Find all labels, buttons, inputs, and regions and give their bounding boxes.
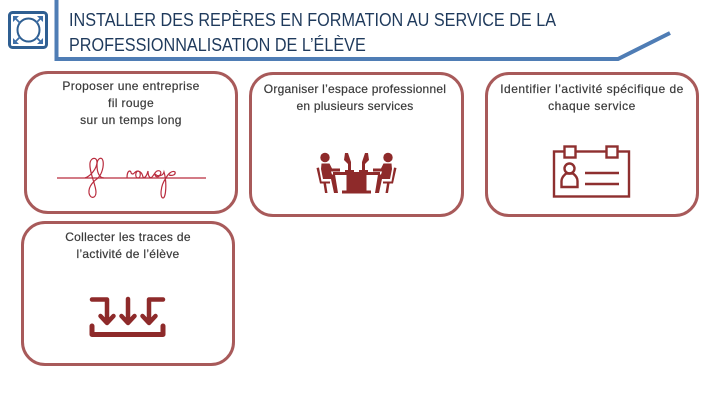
panel: identifier l'activité (485, 72, 699, 217)
panel: proposer une entreprise (24, 71, 238, 214)
text: proposer une entreprise: fil rouge (108, 96, 154, 110)
text: identifier l'activité (500, 82, 684, 113)
panel: collecter les traces (21, 221, 235, 366)
text: proposer une entreprise: Proposer une entreprise (62, 79, 200, 93)
text: proposer une entreprise (62, 79, 200, 127)
title: INSTALLER DES REPÈRES EN FORMATION AU SERVICE DE LA (69, 10, 556, 30)
text: organiser l'espace: en plusieurs services (296, 99, 414, 113)
text: identifier l'activité: chaque service (548, 99, 636, 113)
title (69, 10, 556, 55)
text: proposer une entreprise: sur un temps long (80, 113, 182, 127)
text: organiser l'espace (264, 82, 446, 113)
panel: organiser l'espace (249, 72, 464, 217)
text: collecter les traces: l’activité de l’élève (76, 247, 180, 261)
text: identifier l'activité: Identifier l’activité spécifique de (500, 82, 684, 96)
title: PROFESSIONNALISATION DE L’ÉLÈVE (69, 35, 366, 55)
text: collecter les traces (65, 230, 191, 261)
text: collecter les traces: Collecter les traces de (65, 230, 191, 244)
text: organiser l'espace: Organiser l’espace professionnel (264, 82, 446, 96)
